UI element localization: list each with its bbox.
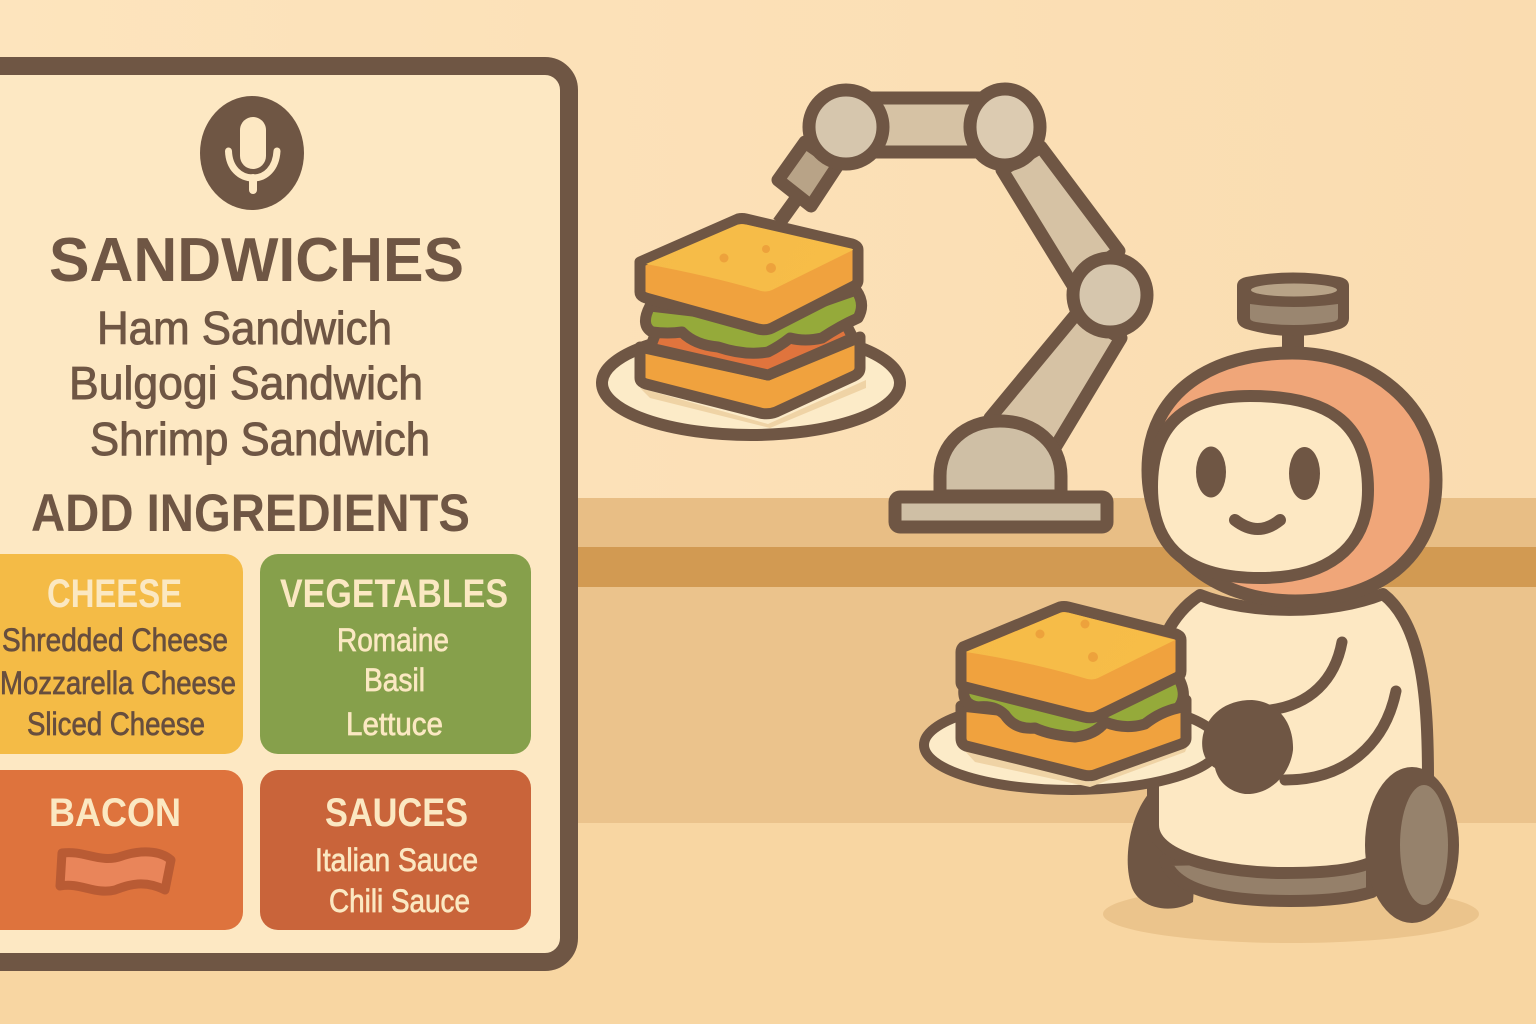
background wall — [0, 0, 1536, 498]
arm link: upper — [1002, 147, 1119, 284]
heading: add ingredients: ADD INGREDIENTS — [31, 484, 470, 543]
top bread face — [646, 224, 853, 292]
sandwich shadow — [640, 380, 866, 428]
card: cheese: Mozzarella Cheese — [0, 665, 236, 701]
heading: sandwiches: SANDWICHES — [49, 226, 464, 295]
card: vegetables — [260, 554, 531, 754]
card: sauces: Italian Sauce — [315, 842, 478, 878]
card: vegetables: Basil — [364, 662, 425, 698]
arm gripper — [778, 142, 838, 223]
left eye — [1196, 446, 1226, 498]
robot hand — [1202, 700, 1293, 794]
smile — [1235, 520, 1280, 529]
plate — [602, 331, 900, 435]
panel: menu board — [0, 66, 569, 962]
card: bacon: BACON — [49, 791, 181, 835]
sandwich list: Ham Sandwich — [97, 302, 392, 354]
tray top bread — [961, 606, 1181, 718]
bottom bread — [640, 337, 860, 414]
counter edge band — [0, 547, 1536, 587]
card: sauces: Chili Sauce — [329, 883, 470, 919]
panel frame — [0, 66, 569, 962]
upper arm line — [1270, 642, 1342, 710]
lettuce layer — [645, 290, 862, 353]
bread seeds — [720, 245, 776, 273]
base band — [1165, 855, 1372, 901]
card: sauces: SAUCES — [325, 791, 468, 835]
tray plate — [924, 700, 1220, 790]
arm joint 2 — [970, 89, 1040, 165]
counter front — [0, 587, 1536, 823]
tomato layer — [650, 322, 853, 375]
counter top band — [0, 498, 1536, 547]
card: vegetables: Lettuce — [346, 706, 443, 742]
plated sandwich under arm — [602, 218, 900, 435]
right wheel hub — [1400, 785, 1448, 905]
tray sandwich shadow — [962, 745, 1188, 787]
right eye — [1289, 447, 1320, 500]
robot floor shadow — [1103, 885, 1479, 943]
card: cheese: Shredded Cheese — [2, 622, 228, 658]
icon: microphone — [200, 96, 304, 210]
arm base dome — [940, 421, 1061, 496]
sandwich list: Shrimp Sandwich — [90, 413, 430, 465]
card: cheese — [0, 554, 243, 754]
card: vegetables: VEGETABLES — [280, 572, 508, 616]
face — [1152, 396, 1368, 578]
lower arm line — [1285, 691, 1396, 780]
arm link: lower — [990, 313, 1121, 446]
top bread — [640, 218, 858, 330]
sandwich on robot tray — [924, 606, 1220, 790]
waiter robot — [1103, 272, 1479, 943]
floor — [0, 823, 1536, 1024]
left wheel — [1128, 792, 1200, 909]
robot arm — [778, 89, 1147, 527]
hat — [1237, 272, 1349, 354]
arm joint 3 — [1073, 258, 1147, 332]
card: cheese: Sliced Cheese — [27, 706, 205, 742]
right wheel — [1365, 767, 1459, 923]
card: vegetables: Romaine — [337, 622, 449, 658]
sandwich list — [69, 302, 430, 465]
tray bread seeds — [1036, 620, 1098, 662]
tray bottom bread — [961, 700, 1186, 776]
tray lettuce — [964, 672, 1183, 737]
card: sauces — [260, 770, 531, 930]
head shell — [1148, 353, 1436, 601]
body — [1153, 594, 1428, 873]
arm joint 1 — [809, 90, 883, 164]
arm link: top — [868, 98, 986, 152]
card: bacon — [0, 770, 243, 930]
arm base plate — [895, 497, 1107, 527]
tray top bread face — [966, 612, 1175, 680]
icon: bacon strip — [60, 852, 171, 891]
sandwich list: Bulgogi Sandwich — [69, 357, 423, 409]
card: cheese: CHEESE — [47, 572, 182, 616]
